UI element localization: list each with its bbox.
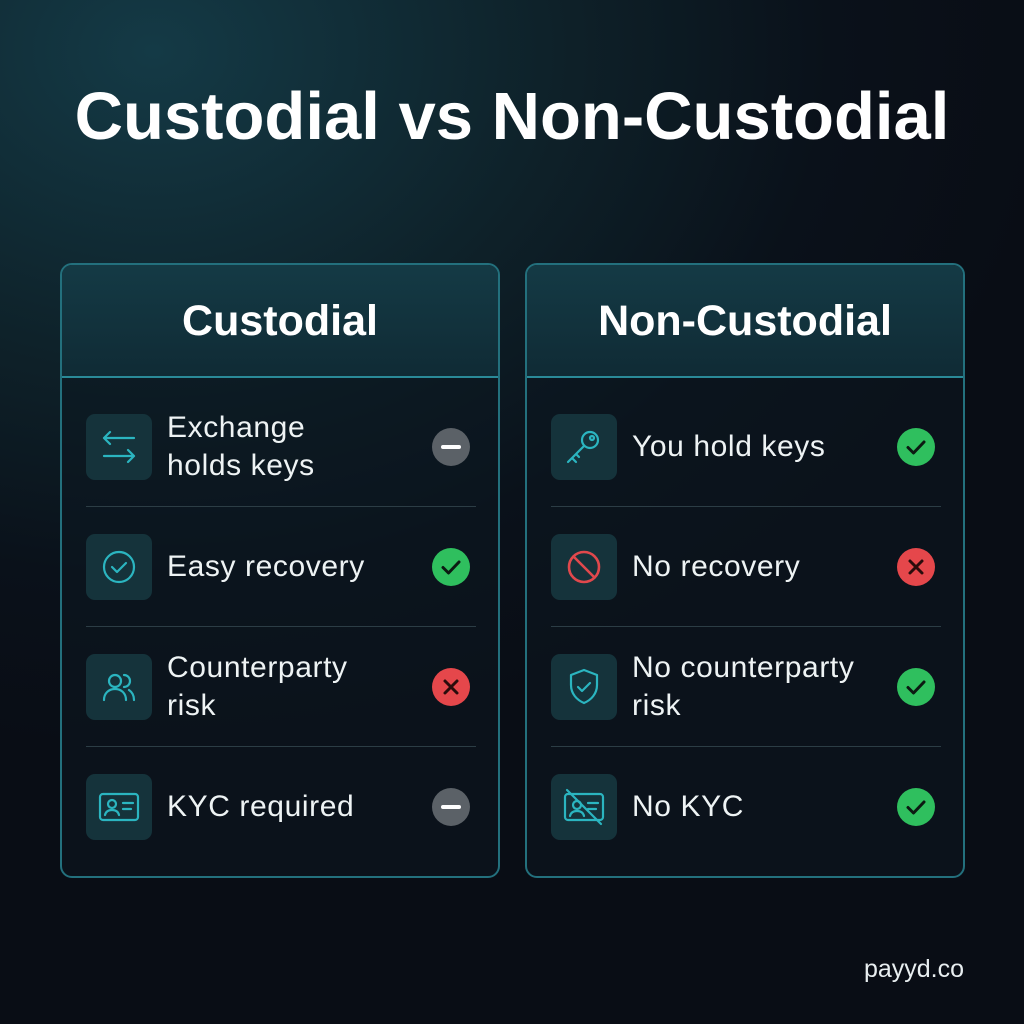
text: Counterparty xyxy=(167,651,348,684)
icon: key xyxy=(551,414,617,480)
text: risk xyxy=(167,689,216,722)
row: counterparty risk xyxy=(86,651,470,722)
icon: prohibited xyxy=(551,534,617,600)
icon: id card xyxy=(86,774,152,840)
icon: id card crossed xyxy=(551,774,617,840)
status: neutral xyxy=(432,428,470,466)
text: You hold keys xyxy=(632,430,826,463)
status: neutral xyxy=(432,788,470,826)
icon: check circle xyxy=(86,534,152,600)
text: holds keys xyxy=(167,449,315,482)
status: cross xyxy=(432,668,470,706)
footer: brand: payyd.co xyxy=(864,955,964,983)
row: no recovery xyxy=(551,534,935,600)
text: No KYC xyxy=(632,790,744,823)
icon: users xyxy=(86,654,152,720)
text: risk xyxy=(632,689,681,722)
text: No recovery xyxy=(632,550,800,583)
text xyxy=(167,651,348,722)
panel: non-custodial xyxy=(525,263,965,878)
status: check xyxy=(897,428,935,466)
text: No counterparty xyxy=(632,651,854,684)
status: check xyxy=(897,788,935,826)
row: no kyc xyxy=(551,774,935,840)
text xyxy=(632,651,854,722)
row: easy recovery xyxy=(86,534,470,600)
row: exchange holds keys xyxy=(86,411,470,482)
row: kyc required xyxy=(86,774,470,840)
status: check xyxy=(897,668,935,706)
status: check xyxy=(432,548,470,586)
text: Easy recovery xyxy=(167,550,365,583)
icon: arrows xyxy=(86,414,152,480)
row: you hold keys xyxy=(551,414,935,480)
status: cross xyxy=(897,548,935,586)
row: no counterparty risk xyxy=(551,651,935,722)
text: KYC required xyxy=(167,790,354,823)
title: Custodial vs Non-Custodial xyxy=(75,79,949,154)
heading: custodial: Custodial xyxy=(182,297,378,345)
heading: non-custodial xyxy=(527,265,963,378)
text xyxy=(167,411,315,482)
panel: custodial xyxy=(60,263,500,878)
text: Exchange xyxy=(167,411,305,444)
heading: custodial xyxy=(62,265,498,378)
icon: shield xyxy=(551,654,617,720)
heading: non-custodial: Non-Custodial xyxy=(598,297,892,345)
